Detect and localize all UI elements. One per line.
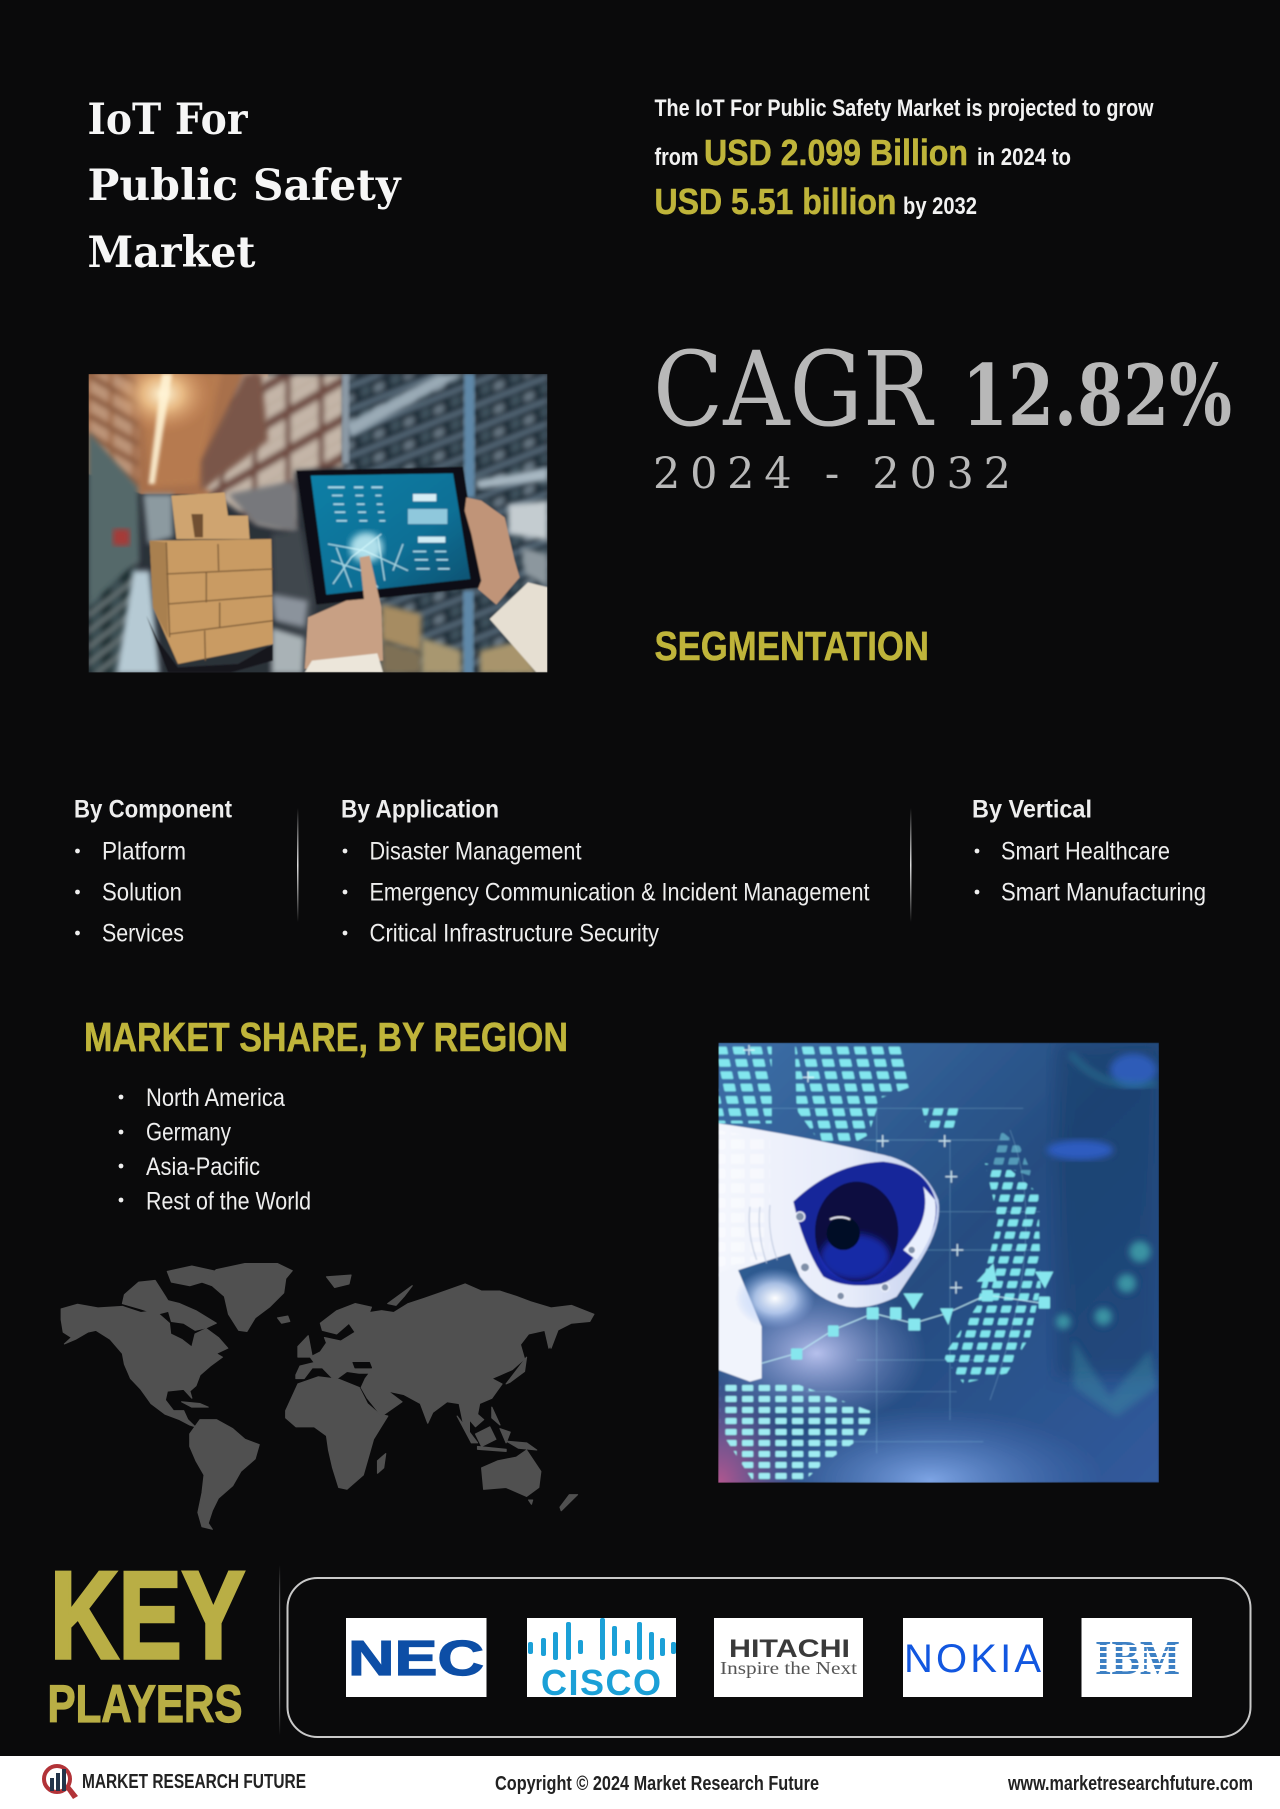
photo: surveillance camera and digital globe [718, 1042, 1159, 1483]
logo: Nokia [903, 1618, 1043, 1697]
title: Public Safety [88, 161, 402, 211]
right racks [345, 374, 548, 674]
segment: by component: Solution [102, 878, 182, 906]
segment: by component: By Component [74, 796, 233, 824]
left hand [305, 556, 383, 669]
market size summary: in 2024 to [977, 144, 1071, 171]
market size summary: USD 5.51 billion [654, 181, 896, 222]
heading: market share by region: MARKET SHARE, BY REGION [84, 1014, 568, 1060]
market size summary: from [654, 144, 698, 171]
photo: warehouse with tablet [88, 354, 548, 674]
heading: key players [48, 1547, 245, 1734]
segment: by vertical: By Vertical [972, 796, 1092, 824]
segment: by application: Disaster Management [370, 838, 582, 866]
lower right goods [381, 604, 421, 652]
segment: by component: Platform [102, 838, 186, 866]
middle shelves [205, 374, 345, 531]
tablet [296, 467, 482, 605]
logo: IBM [1082, 1618, 1192, 1697]
digital globe tiles [718, 1044, 772, 1123]
pallet of boxes [146, 616, 273, 672]
logo: Cisco [527, 1618, 676, 1703]
left dark rack [88, 431, 140, 614]
market size summary: by 2032 [903, 193, 977, 220]
logo: Hitachi: HITACHI [729, 1635, 850, 1663]
segment: by component [74, 796, 233, 948]
market size summary [654, 95, 1154, 222]
segment: by vertical: Smart Manufacturing [1001, 878, 1206, 906]
region list: Asia-Pacific [146, 1153, 260, 1181]
right hand [465, 497, 520, 605]
icon: market research future logo [44, 1766, 78, 1799]
logo: Hitachi [714, 1618, 863, 1697]
region list: Rest of the World [146, 1188, 311, 1216]
footer band [0, 1756, 1280, 1809]
logo: Nokia: NOKIA [904, 1637, 1041, 1681]
CAGR: 2024 - 2032 [653, 449, 1011, 499]
camera body [718, 1123, 939, 1307]
heading: key players: KEY [50, 1547, 245, 1685]
heading: segmentation: SEGMENTATION [654, 623, 929, 669]
camera hood and lens [793, 1162, 937, 1286]
segment: by application [341, 796, 870, 948]
blurred graph at right [1056, 1241, 1157, 1417]
title: Market [88, 228, 256, 278]
segment: by application: Critical Infrastructure Security [370, 920, 659, 948]
region list [119, 1084, 311, 1216]
warm aisle and ceiling [88, 374, 268, 494]
logo: Hitachi: Inspire the Next [720, 1658, 857, 1678]
market size summary: USD 2.099 Billion [704, 132, 968, 173]
footer copyright: Copyright © 2024 Market Research Future [495, 1773, 819, 1795]
segment: by application: Emergency Communication & Incident Management [370, 878, 870, 906]
heading: key players: PLAYERS [48, 1675, 242, 1734]
rising data line [762, 1263, 1053, 1363]
floor [116, 571, 160, 674]
region list: North America [146, 1084, 285, 1112]
title: IoT For [88, 95, 249, 145]
CAGR: CAGR [653, 330, 935, 450]
logo: NEC [346, 1618, 486, 1697]
logo: Cisco: CISCO [541, 1662, 661, 1703]
segment: by vertical: Smart Healthcare [1001, 838, 1170, 866]
panel: key player logos [288, 1578, 1250, 1737]
segment: by component: Services [102, 920, 184, 948]
CAGR [653, 330, 1232, 499]
title [88, 95, 402, 278]
logo: NEC: NEC [348, 1632, 484, 1686]
lower middle clutter [271, 531, 315, 637]
market size summary: The IoT For Public Safety Market is projected to grow [654, 95, 1154, 122]
segment: by vertical [972, 796, 1206, 906]
logo: IBM: IBM [1095, 1630, 1180, 1685]
region list: Germany [146, 1118, 231, 1146]
footer brand: MARKET RESEARCH FUTURE [82, 1771, 306, 1793]
world map [61, 1264, 594, 1529]
segment: by application: By Application [341, 796, 499, 824]
